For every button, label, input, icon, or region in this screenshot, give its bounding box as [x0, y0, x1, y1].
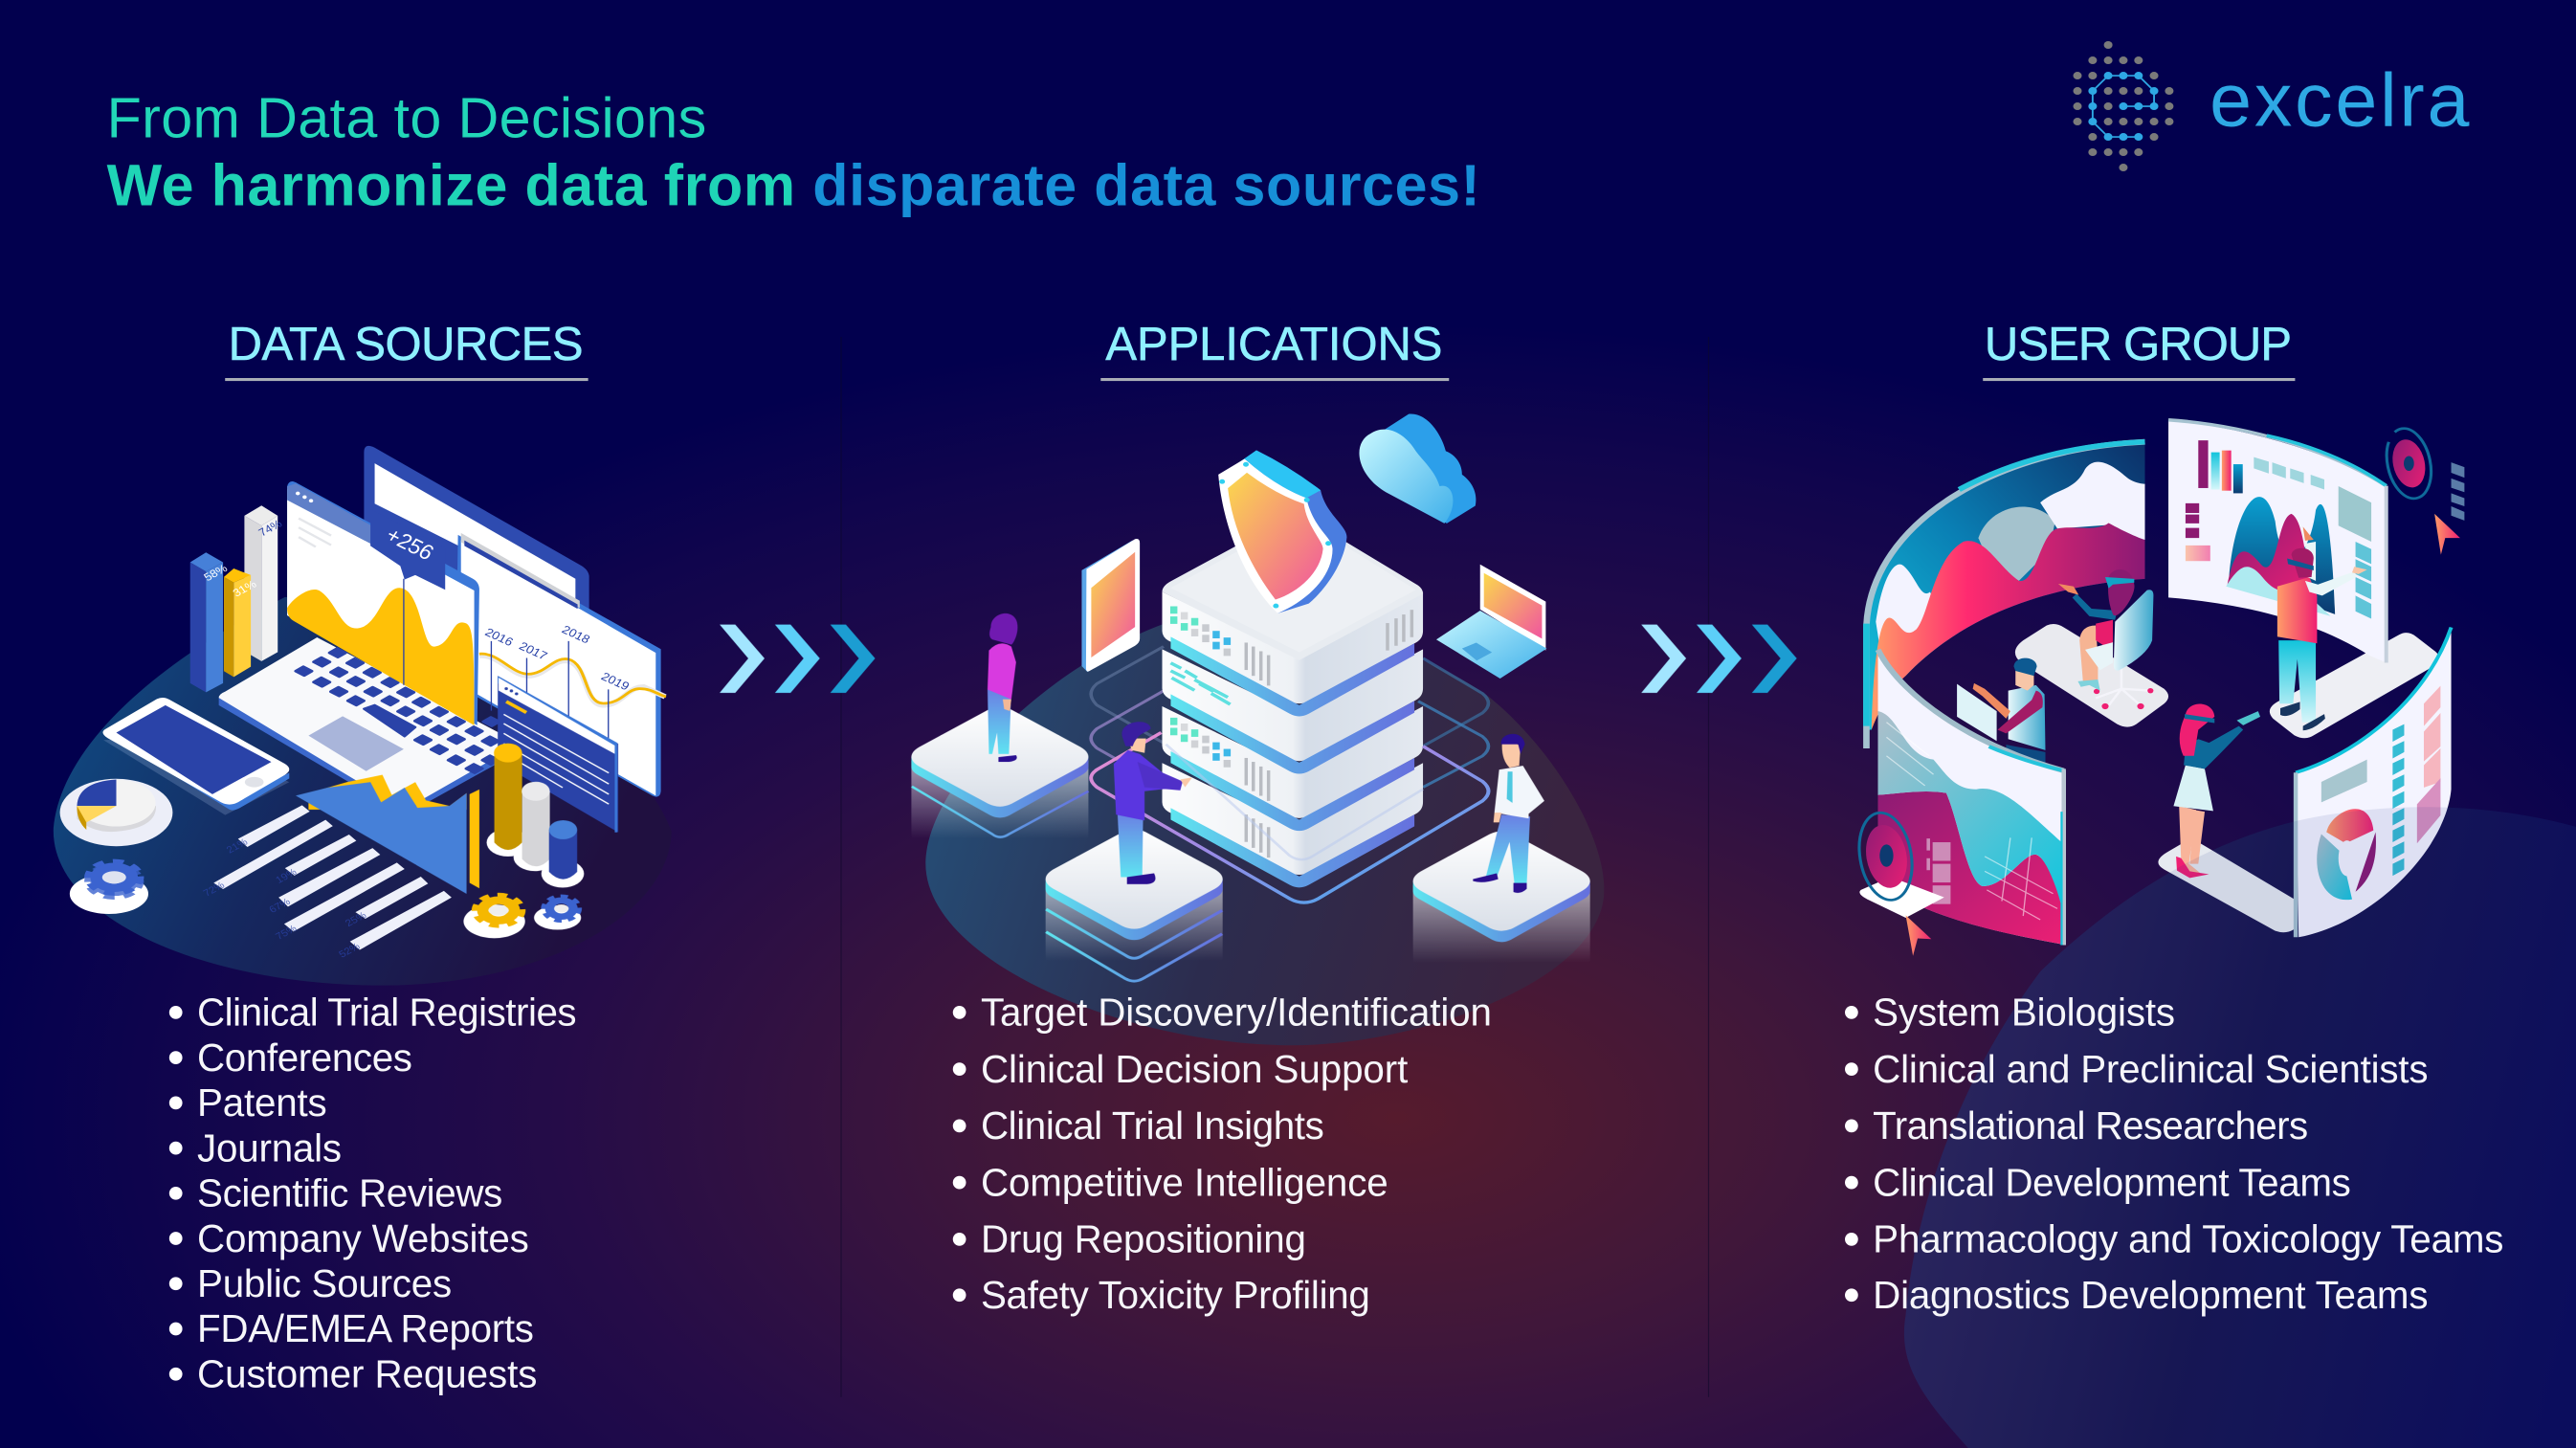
percent labels: 25%	[344, 910, 369, 929]
logo wordmark: excelra	[2210, 58, 2469, 143]
percent bars	[213, 805, 452, 950]
dividers	[841, 337, 1709, 1397]
cloud	[1359, 413, 1476, 524]
small laptop	[1436, 565, 1546, 679]
value tag	[370, 509, 445, 685]
list: applications: Drug Repositioning	[981, 1217, 1306, 1261]
left lower screen	[1878, 650, 2066, 945]
person: man in vr	[2277, 526, 2367, 730]
pie chart	[60, 779, 172, 846]
laptop keys	[296, 648, 500, 773]
back left curved screen	[1866, 442, 2145, 748]
percent labels	[202, 836, 369, 960]
chart window	[287, 481, 479, 725]
list: user group: Diagnostics Development Teams	[1873, 1273, 2428, 1317]
title	[107, 85, 1480, 218]
shield	[1218, 451, 1346, 613]
timeline panel: 2016	[482, 625, 516, 649]
floor back left	[2015, 624, 2168, 727]
translucent blob over screen	[1904, 807, 2576, 1448]
list: data sources: Clinical Trial Registries	[197, 991, 577, 1035]
arrows: applications to users	[1641, 625, 1797, 693]
list: data sources: Public Sources	[197, 1261, 452, 1305]
heading: user group: USER GROUP	[1985, 319, 2292, 370]
platform blob	[54, 597, 672, 986]
list: user group: System Biologists	[1873, 991, 2175, 1035]
platform centre	[1046, 829, 1223, 981]
logo: excelra	[2073, 41, 2469, 171]
list: applications	[953, 991, 1492, 1317]
floor back right	[2270, 633, 2439, 738]
timeline panel	[455, 533, 666, 797]
platform right	[1413, 832, 1590, 963]
list: applications: Target Discovery/Identification	[981, 991, 1492, 1035]
list: user group	[1845, 991, 2503, 1317]
floor front	[2158, 840, 2295, 932]
list: user group: Clinical and Preclinical Scientists	[1873, 1047, 2428, 1091]
illustration: immersive data screens	[1854, 420, 2464, 956]
person: standing man	[1473, 734, 1544, 893]
list: data sources: Scientific Reviews	[197, 1171, 502, 1215]
cursor bottom left	[1906, 915, 1931, 956]
3d bars: 74%	[255, 517, 285, 539]
back monitor	[364, 446, 589, 627]
connector ring middle front	[1166, 745, 1423, 859]
list: data sources: FDA/EMEA Reports	[197, 1306, 534, 1350]
target icon top right	[2381, 425, 2437, 501]
platform blob	[925, 620, 1604, 1045]
list: user group: Translational Researchers	[1873, 1103, 2308, 1147]
person: man with laptop	[1957, 658, 2045, 764]
percent labels: 72%	[202, 880, 227, 899]
title line 2: We harmonize data from disparate data sources!	[107, 153, 1480, 218]
right lower screen	[2296, 628, 2452, 937]
list: applications: Clinical Trial Insights	[981, 1103, 1324, 1147]
timeline panel: 2018	[560, 623, 592, 646]
list: data sources: Patents	[197, 1080, 327, 1125]
list: applications: Safety Toxicity Profiling	[981, 1273, 1370, 1317]
timeline panel: 2019	[599, 670, 632, 693]
person: pointing man	[1114, 722, 1192, 884]
laptop base	[219, 637, 520, 815]
percent labels: 75%	[274, 923, 300, 943]
timeline panel: 2017	[517, 639, 550, 662]
connector ring front	[1091, 732, 1488, 902]
side bars top right	[2452, 462, 2464, 521]
list: data sources: Company Websites	[197, 1216, 529, 1260]
area chart	[296, 775, 479, 894]
value tag: +256	[382, 524, 438, 565]
list: data sources: Conferences	[197, 1036, 412, 1080]
gear: yellow	[463, 895, 525, 938]
smartphone	[102, 698, 289, 815]
percent labels: 67%	[267, 896, 293, 916]
3d bars: 58%	[201, 562, 230, 584]
list: applications: Competitive Intelligence	[981, 1160, 1388, 1204]
cylinders	[487, 744, 584, 887]
3d bars	[190, 505, 285, 692]
list: user group: Pharmacology and Toxicology Teams	[1873, 1217, 2503, 1261]
server stack	[1162, 517, 1423, 887]
percent labels: 52%	[337, 941, 363, 960]
list: applications: Clinical Decision Support	[981, 1047, 1408, 1091]
gear: small blue	[534, 896, 581, 929]
back right screen	[2168, 420, 2387, 662]
heading: data sources: DATA SOURCES	[229, 319, 583, 370]
tablet	[1081, 539, 1140, 672]
title line 1: From Data to Decisions	[107, 85, 706, 149]
illustration: data analytics laptop	[54, 446, 672, 986]
heading: applications: APPLICATIONS	[1105, 319, 1442, 370]
trackpad	[308, 716, 404, 771]
person: seated woman with chair	[2058, 569, 2153, 709]
illustration: secure server	[911, 413, 1604, 1045]
platform left	[911, 707, 1088, 838]
gear: blue large	[70, 861, 148, 914]
list: data sources: Customer Requests	[197, 1351, 537, 1395]
person: woman in skirt	[2173, 704, 2260, 878]
connector rings back	[1091, 647, 1488, 788]
percent labels: 19%	[274, 866, 300, 886]
cursor top right	[2434, 514, 2460, 555]
platform left ring	[912, 787, 1088, 837]
data window	[498, 676, 618, 833]
logo mark	[2073, 41, 2173, 171]
arrows: sources to applications	[720, 625, 876, 693]
target icon bottom left	[1854, 810, 1944, 918]
list: data sources: Journals	[197, 1125, 342, 1170]
percent labels: 21%	[225, 836, 251, 856]
list: data sources	[169, 991, 577, 1395]
person: woman	[988, 613, 1017, 762]
3d bars: 31%	[231, 577, 259, 599]
list: user group: Clinical Development Teams	[1873, 1160, 2351, 1204]
